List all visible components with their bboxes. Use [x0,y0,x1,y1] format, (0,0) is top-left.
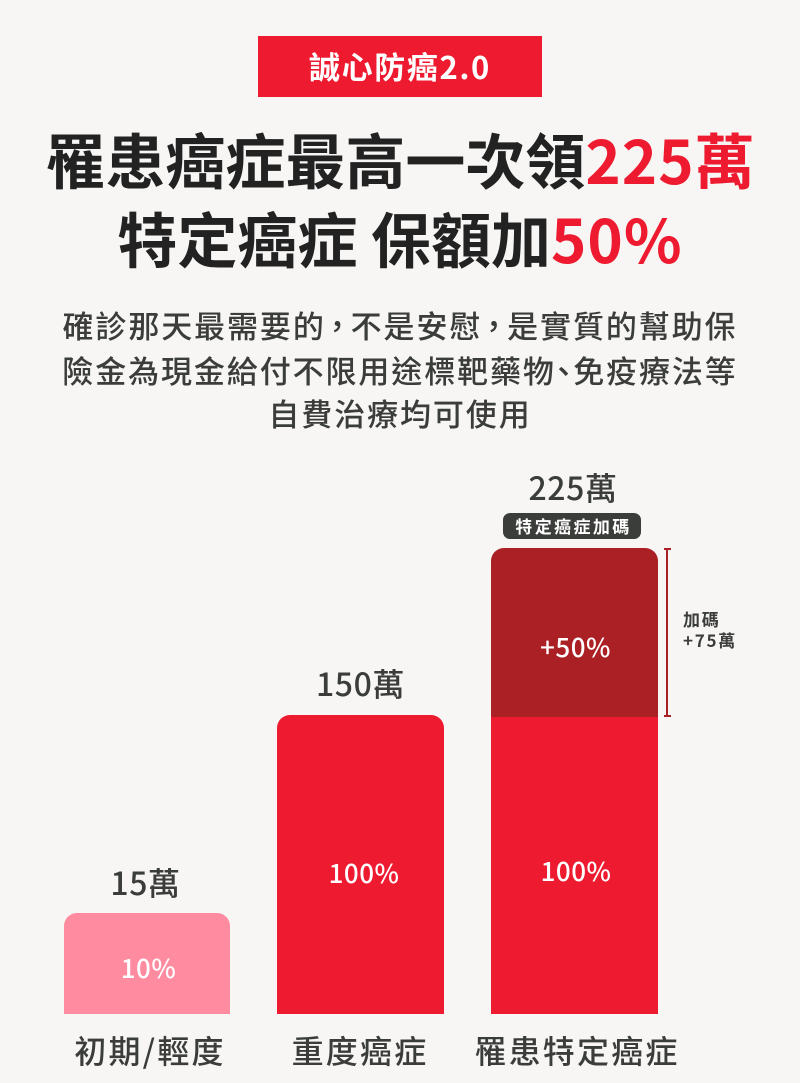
bar: early stage [64,913,230,1014]
bonus note: +75萬 [683,627,737,652]
bar: specific cancer bonus [491,548,658,717]
tag: specific cancer bonus: 特定癌症加碼 [515,513,632,538]
bar chart [64,464,737,1073]
percent label: +50%: +50% [540,628,611,665]
category: severe: 重度癌症 [292,1027,428,1073]
category: specific: 罹患特定癌症 [474,1027,680,1073]
bonus note: 加碼 [683,606,720,631]
percent label: 100%: 100% [329,854,399,891]
headline line 1: 罹患癌症最高一次領225萬 [45,115,755,202]
description line 1: 確診那天最需要的，不是安慰，是實質的幫助保 [63,302,737,347]
bracket: bonus range [664,548,671,717]
percent label: 100%: 100% [541,852,611,889]
title badge: 誠心防癌2.0 [309,43,491,88]
bar: severe cancer [277,715,444,1014]
category: early: 初期/輕度 [74,1027,226,1073]
description line 2: 險金為現金給付不限用途標靶藥物、免疫療法等 [62,347,738,392]
percent label: 10%: 10% [121,949,176,986]
headline line 2: 特定癌症 保額加50% [117,194,683,281]
value label: 15萬: 15萬 [110,859,181,905]
value label: 150萬: 150萬 [316,660,405,706]
description text [62,302,738,435]
description line 3: 自費治療均可使用 [268,390,532,435]
title badge [258,36,542,97]
bar: specific cancer base [491,717,658,1014]
value label: 225萬: 225萬 [528,464,618,510]
bonus note [683,606,737,652]
